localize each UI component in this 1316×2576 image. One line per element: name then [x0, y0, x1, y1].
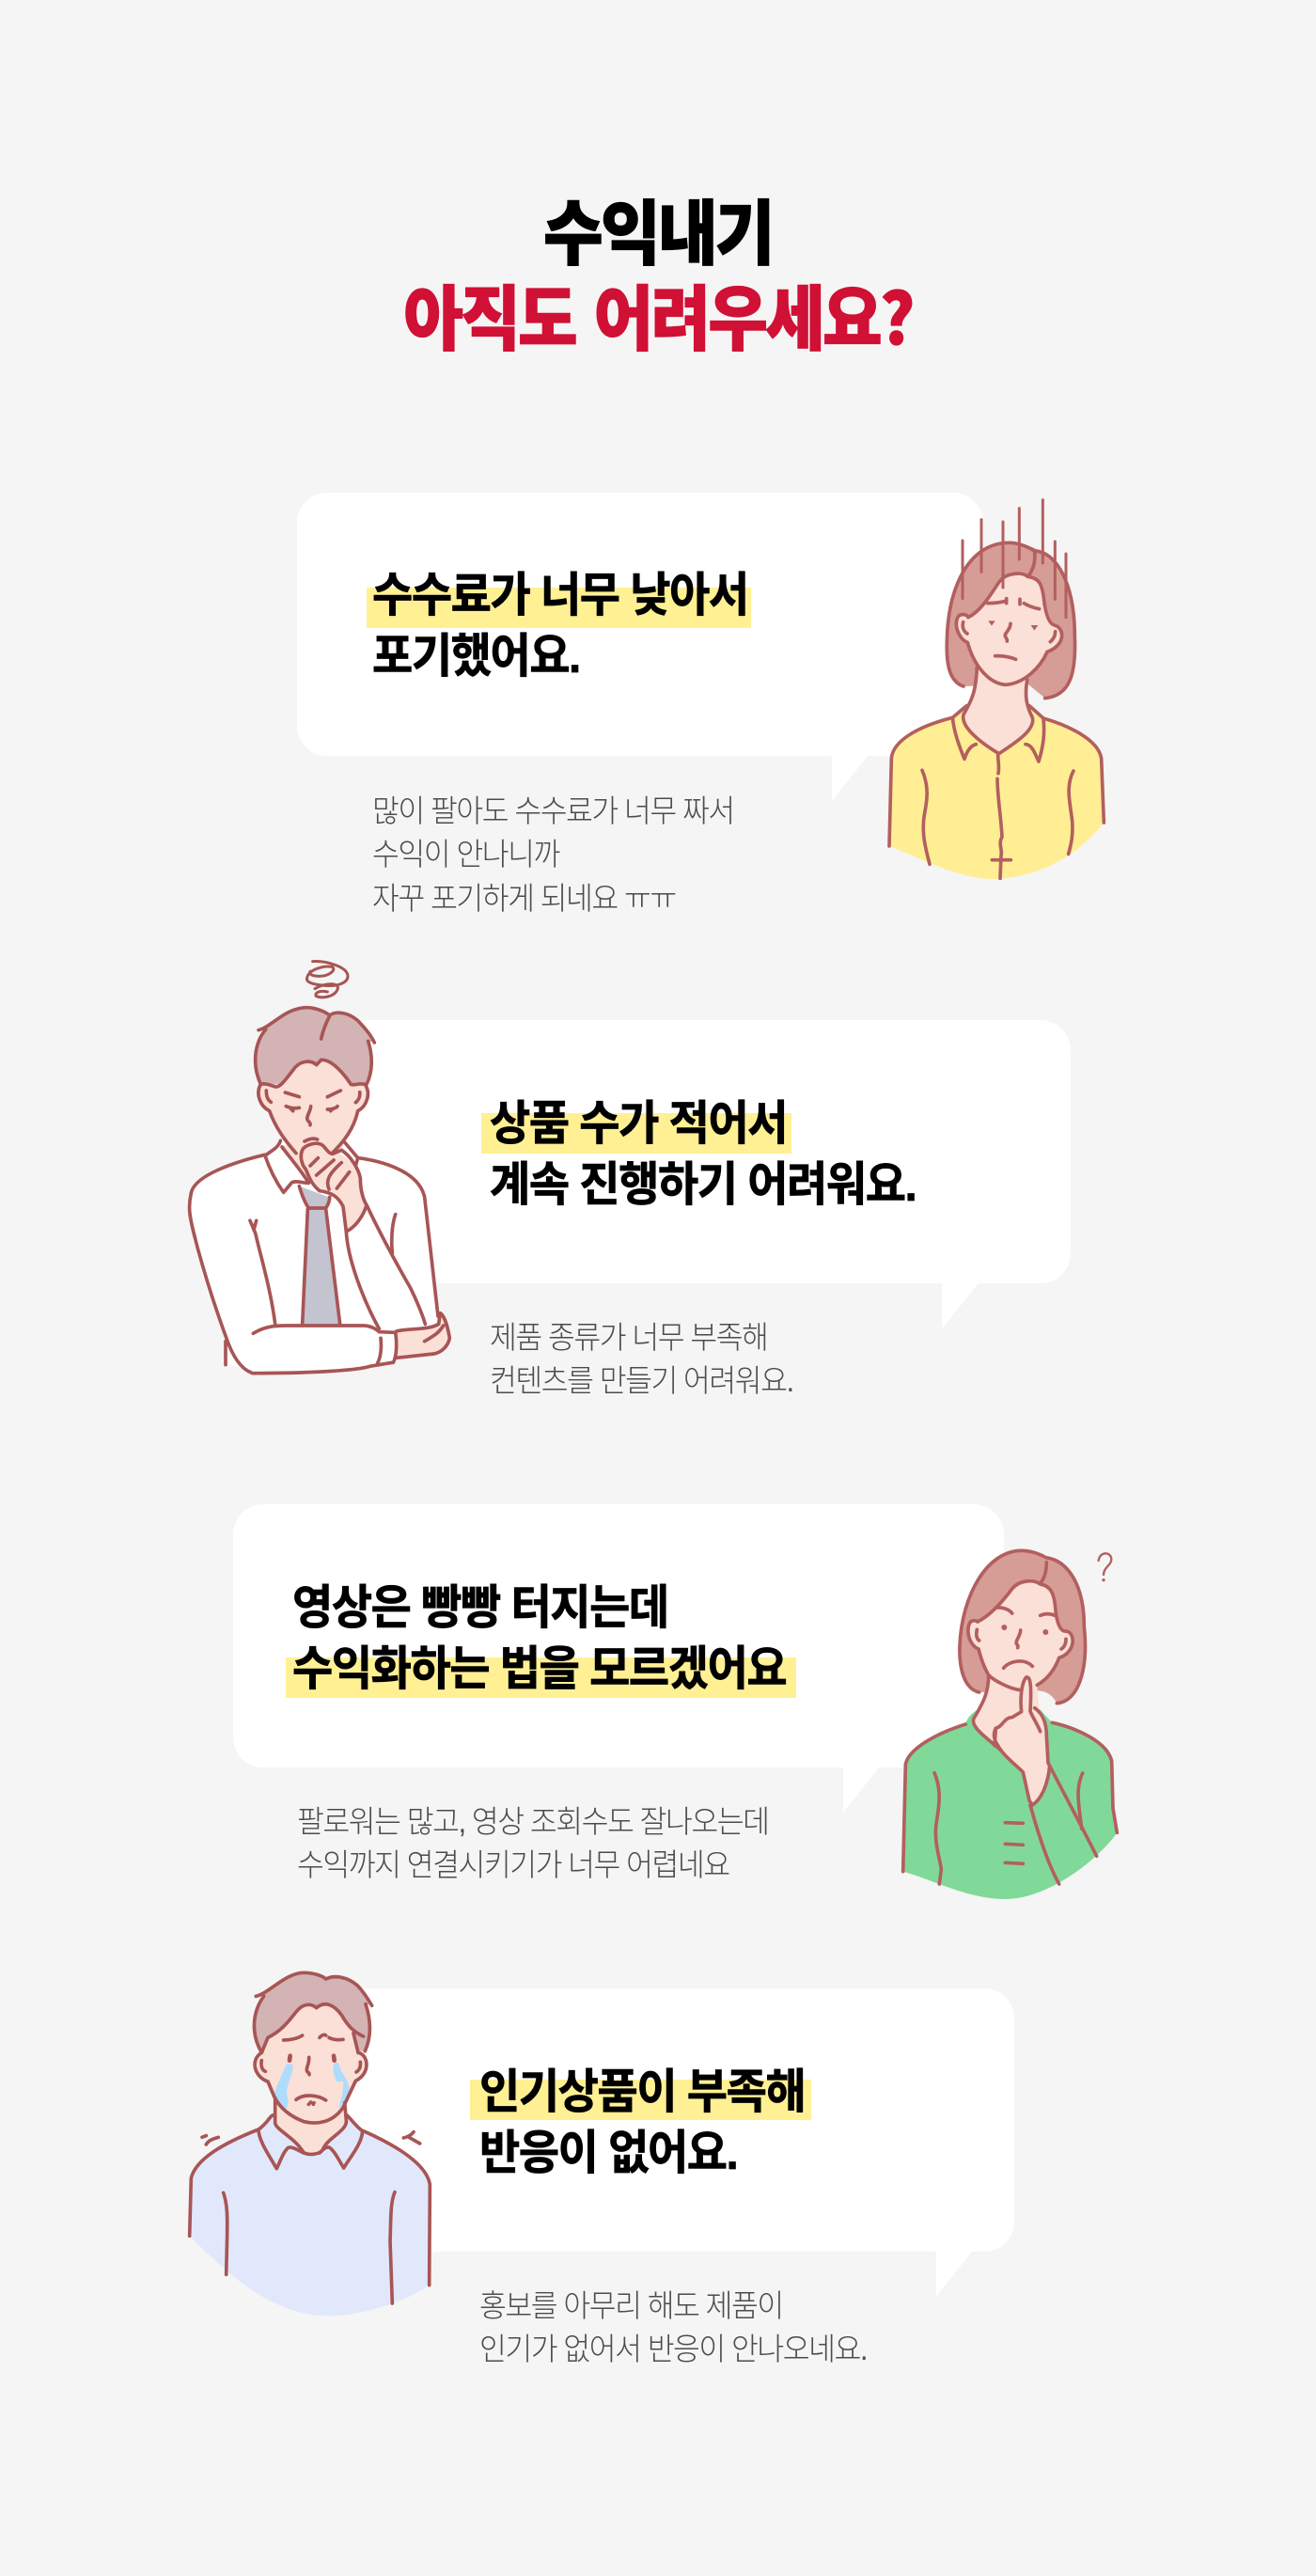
heading: 수익화하는 법을 모르겠어요	[292, 1641, 786, 1694]
title	[403, 177, 913, 365]
heading: 인기상품이 부족해	[479, 2065, 805, 2117]
description: 많이 팔아도 수수료가 너무 짜서	[372, 793, 734, 827]
heading highlight	[367, 588, 751, 628]
icon: questioning woman in green top	[901, 1549, 1119, 1899]
heading: 상품 수가 적어서	[490, 1096, 787, 1149]
description	[297, 1803, 768, 1882]
description: 인기가 없어서 반응이 안나오네요.	[479, 2332, 867, 2366]
heading: 계속 진행하기 어려워요.	[490, 1158, 916, 1211]
description: 자꾸 포기하게 되네요 ㅠㅠ	[372, 880, 676, 916]
description: 컨텐츠를 만들기 어려워요.	[490, 1363, 793, 1398]
description	[490, 1320, 793, 1398]
panel: few products	[188, 960, 1071, 1398]
speech bubble	[338, 1988, 1014, 2252]
heading highlight	[481, 1113, 791, 1154]
description: 수익이 안나니까	[372, 837, 559, 872]
icon: despondent woman in yellow shirt	[887, 498, 1105, 880]
description: 홍보를 아무리 해도 제품이	[479, 2288, 783, 2322]
icon: pondering man with tie	[188, 960, 451, 1374]
description: 제품 종류가 너무 부족해	[490, 1320, 767, 1354]
heading: 포기했어요.	[372, 630, 580, 683]
title line 1: 수익내기	[543, 177, 773, 279]
description	[372, 793, 734, 916]
panel: viral videos but no monetization	[233, 1504, 1119, 1899]
description: 팔로워는 많고, 영상 조회수도 잘나오는데	[297, 1803, 768, 1839]
bubble tail	[843, 1767, 879, 1813]
bubble tail	[936, 2252, 972, 2297]
heading: 영상은 빵빵 터지는데	[292, 1581, 668, 1634]
heading	[490, 1096, 916, 1211]
panel: no popular products	[188, 1971, 1014, 2366]
icon: crying man in blue sweater	[188, 1971, 432, 2317]
heading	[479, 2065, 805, 2179]
speech bubble	[338, 1020, 1071, 1283]
heading highlight	[286, 1657, 796, 1698]
panel: low commission	[297, 493, 1105, 916]
title line 2: 아직도 어려우세요?	[403, 262, 913, 365]
heading	[372, 568, 748, 683]
description: 수익까지 연결시키기가 너무 어렵네요	[297, 1847, 729, 1882]
bubble tail	[832, 756, 868, 801]
description	[479, 2288, 867, 2366]
heading	[292, 1581, 786, 1694]
speech bubble	[233, 1504, 1004, 1767]
heading: 반응이 없어요.	[479, 2127, 737, 2179]
heading highlight	[470, 2080, 811, 2120]
heading: 수수료가 너무 낮아서	[372, 568, 748, 620]
speech bubble	[297, 493, 983, 756]
bubble tail	[942, 1283, 979, 1328]
